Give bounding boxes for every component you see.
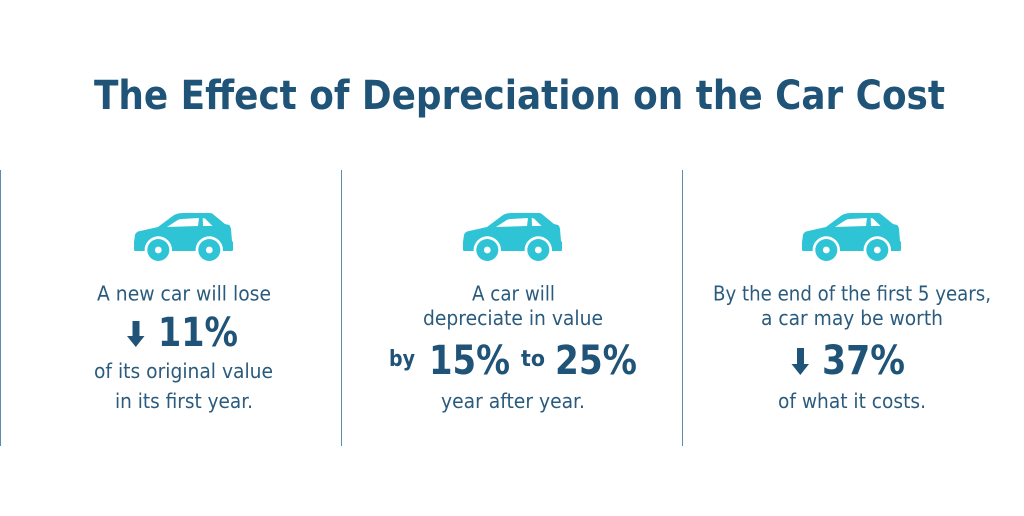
divider: left: [0, 170, 1, 446]
icon: car: [802, 213, 901, 264]
divider: middle: [341, 170, 342, 446]
stat: 37%: 37%: [822, 338, 905, 384]
divider: right: [682, 170, 683, 446]
icon: car: [463, 213, 562, 264]
stat: 25%: 25%: [555, 338, 637, 384]
panel: five years: [713, 213, 991, 413]
text: lead-in line 1: A car will: [472, 282, 555, 306]
text: by: by: [389, 347, 415, 372]
text: lead-in: A new car will lose: [97, 282, 271, 306]
title: The Effect of Depreciation on the Car Cost: [94, 73, 945, 119]
text: lead-in line 2: a car may be worth: [761, 306, 943, 330]
icon: car: [134, 213, 233, 264]
panel: first year: [94, 213, 273, 413]
text: to: to: [521, 347, 545, 372]
stat: 15%: 15%: [429, 338, 510, 384]
text: first year line: in its first year.: [115, 389, 253, 413]
icon: down arrow: [792, 348, 809, 375]
text: closing line: of what it costs.: [778, 389, 926, 413]
panel: year after year: [389, 213, 637, 413]
text: lead-in line 2: depreciate in value: [423, 306, 603, 330]
text: value line: of its original value: [94, 359, 273, 383]
text: closing line: year after year.: [441, 389, 585, 413]
text: lead-in line 1: By the end of the first 5 years,: [713, 282, 991, 306]
stat: 11%: 11%: [158, 310, 238, 356]
icon: down arrow: [127, 321, 144, 347]
